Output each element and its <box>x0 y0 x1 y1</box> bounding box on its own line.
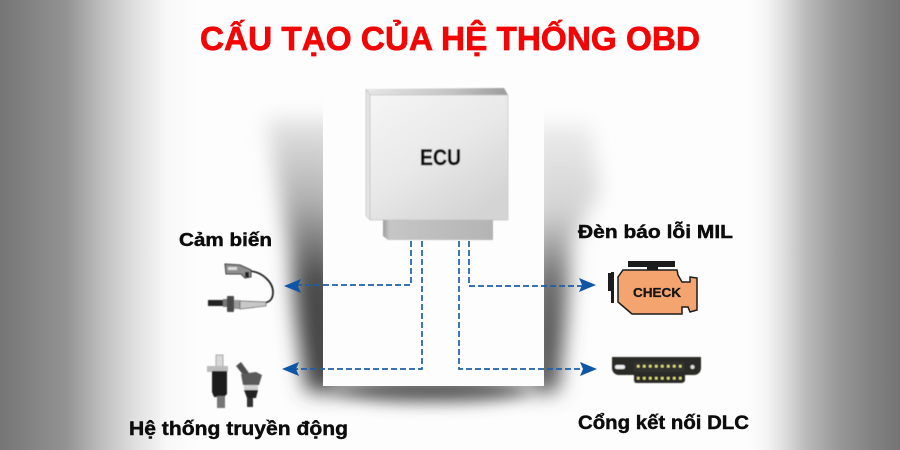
arrowhead: DLC port <box>580 362 597 376</box>
title: CẤU TẠO CỦA HỆ THỐNG OBD <box>200 19 700 57</box>
arrowhead: MIL lamp <box>579 278 596 292</box>
CHECK text: CHECK <box>633 286 681 300</box>
label: DLC port: Cổng kết nối DLC <box>578 413 749 434</box>
wire to powertrain <box>292 241 422 369</box>
label: powertrain: Hệ thống truyền động <box>129 419 348 440</box>
icon: fuel injectors <box>207 355 262 408</box>
arrowhead: powertrain <box>282 362 299 376</box>
icon: oxygen sensor <box>208 264 273 312</box>
wire to DLC port <box>459 241 588 369</box>
label: sensors: Cảm biến <box>179 229 272 250</box>
ECU module <box>366 88 508 240</box>
arrowhead: sensors <box>284 279 301 293</box>
ECU label: ECU <box>420 145 461 170</box>
wiring: dashed blue lines and arrows <box>292 241 588 369</box>
panel: central board with shadow <box>266 60 600 402</box>
icon: check engine lamp <box>608 261 697 314</box>
icon: DLC connector <box>612 357 701 383</box>
label: MIL lamp: Đèn báo lỗi MIL <box>578 221 733 242</box>
wire to sensors <box>292 241 411 285</box>
wire to MIL lamp <box>469 241 588 286</box>
